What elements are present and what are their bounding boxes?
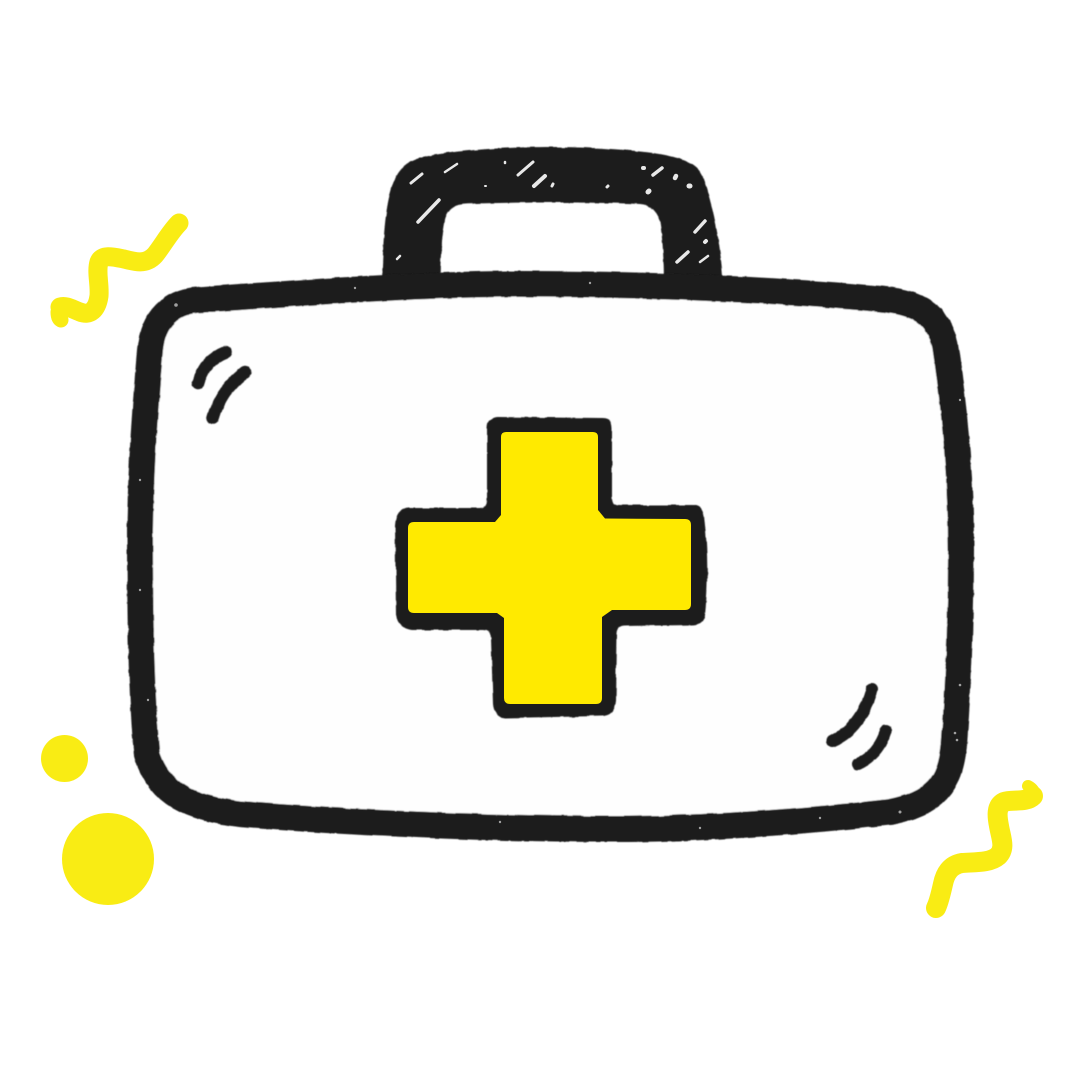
gloss marks top left	[198, 352, 245, 418]
dot: small yellow	[41, 735, 88, 782]
handle highlights	[397, 162, 708, 262]
kit body	[140, 284, 961, 829]
body speckles	[139, 282, 961, 829]
icon: first aid kit	[139, 147, 961, 829]
squiggle: bottom right	[936, 786, 1036, 908]
cross fill	[408, 432, 691, 704]
icon: yellow cross	[395, 417, 707, 718]
squiggle: top left	[58, 223, 179, 320]
gloss marks bottom right	[832, 689, 886, 764]
kit handle	[382, 147, 723, 285]
cross outline	[395, 417, 707, 718]
dot: large yellow	[62, 813, 154, 905]
